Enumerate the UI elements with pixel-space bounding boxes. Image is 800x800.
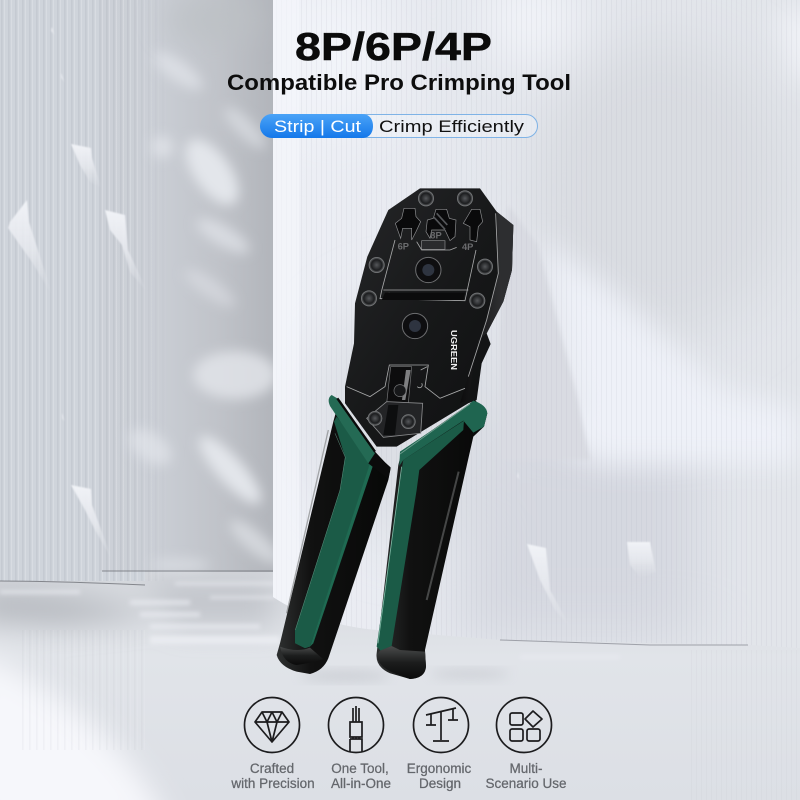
tool head: 4P: [462, 242, 473, 252]
icon: apps grid: [496, 698, 552, 752]
tool shadow: [300, 670, 510, 681]
tool head: 8P: [430, 230, 442, 240]
left handle: [277, 395, 391, 674]
UGREEN logo: UGREEN: [449, 330, 459, 370]
crimp cavities: [395, 208, 483, 249]
caption: One Tool, All-in-One: One Tool,: [331, 761, 389, 776]
tool head: [345, 188, 513, 447]
right handle: [376, 400, 487, 679]
caption: Multi-Scenario Use: Multi-: [510, 761, 542, 776]
left back wall: [0, 0, 286, 581]
cutter: [367, 367, 423, 437]
caption: Crafted with Precision: Crafted: [250, 761, 294, 776]
crimping tool: [277, 188, 513, 679]
feature pill: Strip | Cut: [274, 118, 361, 136]
title: 8P/6P/4P: [295, 26, 492, 69]
feature pill: Crimp Efficiently: [379, 118, 525, 136]
screws: [361, 191, 493, 308]
wall: [270, 0, 800, 660]
caption: Crafted with Precision: with Precision: [230, 776, 315, 791]
icon: cable: [328, 698, 384, 752]
feature pill: [260, 114, 538, 138]
pivots: [402, 257, 441, 339]
caption: Multi-Scenario Use: Scenario Use: [485, 776, 567, 791]
subtitle: Compatible Pro Crimping Tool: [227, 70, 571, 95]
caption: Ergonomic Design: Ergonomic: [407, 761, 472, 776]
feature icons: [230, 698, 567, 791]
caption: One Tool, All-in-One: All-in-One: [331, 776, 391, 791]
icon: ergonomic balance: [414, 698, 468, 752]
caption: Ergonomic Design: Design: [419, 776, 461, 791]
floor: [0, 560, 800, 800]
icon: diamond: [244, 698, 300, 752]
tool head: 6P: [398, 241, 409, 251]
